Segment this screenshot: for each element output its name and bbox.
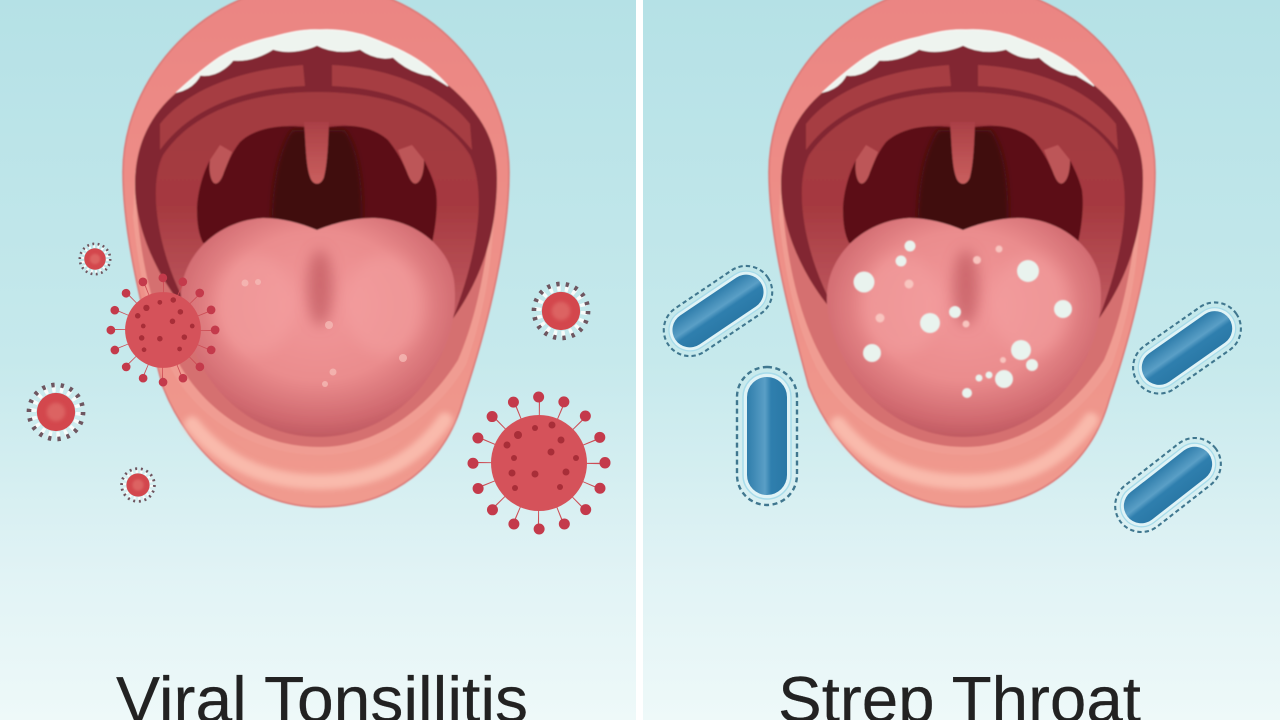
virus: upper right [534,284,588,338]
panel: strep throat [643,0,1280,720]
white patches on tongue [854,240,1072,398]
illustration: open mouth with white spots [769,0,1155,507]
virus: left [29,385,83,439]
bacterium: vertical [737,367,797,505]
bacterium: lower right [1105,427,1231,543]
panel background left [0,0,636,720]
illustration: open mouth with red tongue [123,0,509,507]
virus: bottom left small [122,469,154,501]
panel background right [643,0,1280,720]
bacterium: upper left [654,256,782,366]
bacterium: upper right [1123,292,1251,404]
tongue bumps [242,279,407,387]
virus: overlapping mouth [111,278,215,382]
virus: large, right [473,397,605,529]
panel: viral tonsillitis [0,0,636,720]
virus: top left small [80,244,110,274]
